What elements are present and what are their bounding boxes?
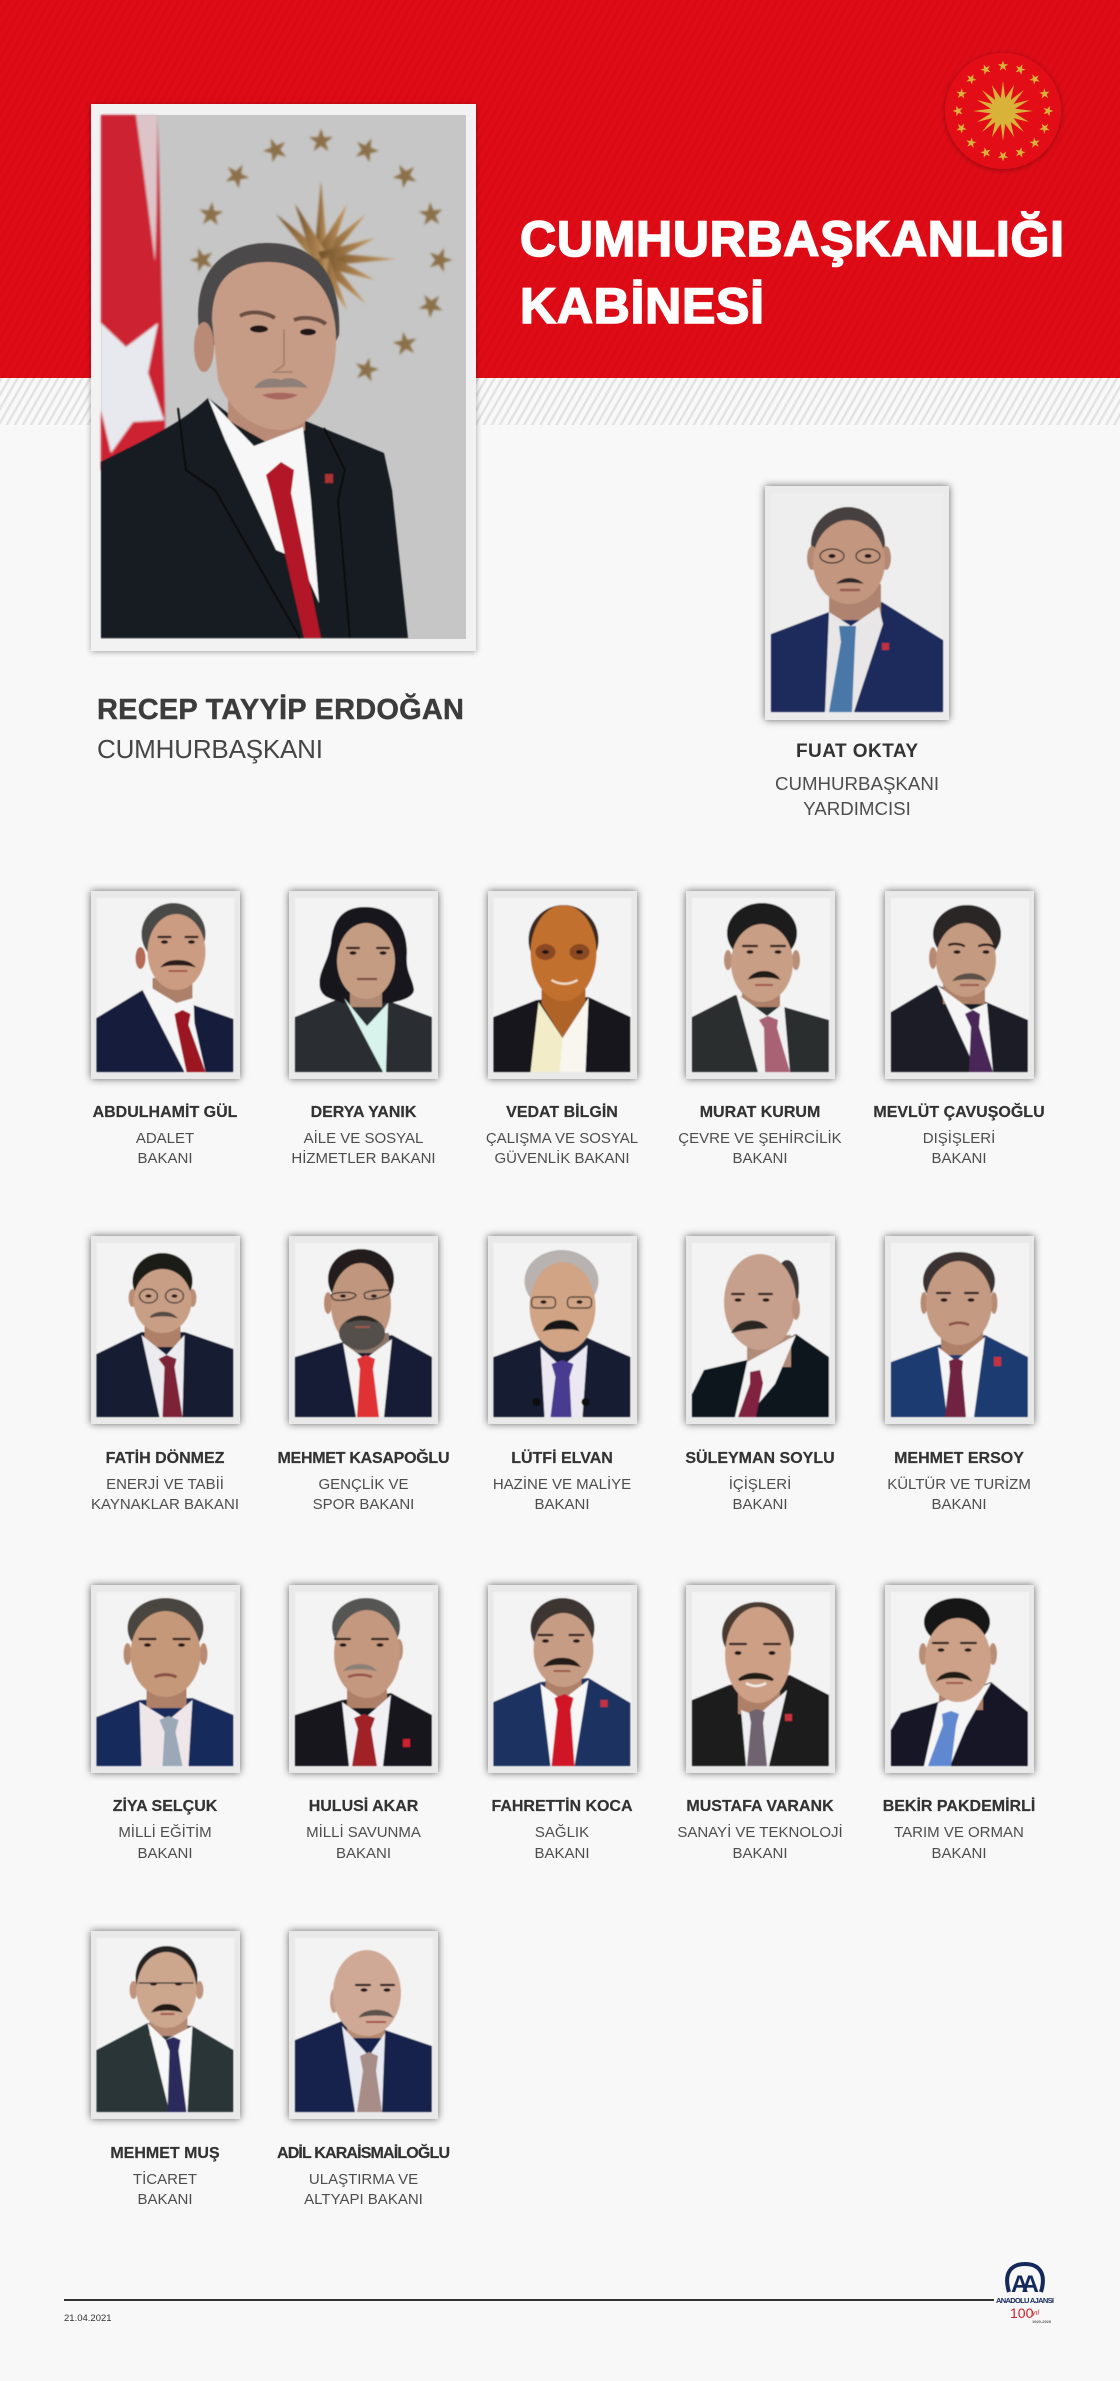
text: vice president role: YARDIMCISI xyxy=(803,798,911,819)
role xyxy=(91,1475,239,1513)
photo: Lütfi Elvan xyxy=(494,1243,632,1417)
panel: Mehmet Muş xyxy=(91,1931,240,2208)
name: MURAT KURUM xyxy=(700,1104,820,1121)
role: BAKANI xyxy=(137,1845,193,1862)
role: GENÇLİK VE xyxy=(318,1475,409,1493)
panel: Mehmet Ersoy xyxy=(885,1236,1034,1513)
panel: president portrait xyxy=(91,104,476,651)
photo: Mehmet Ersoy xyxy=(891,1243,1029,1417)
name: SÜLEYMAN SOYLU xyxy=(685,1448,835,1467)
heading: president name: RECEP TAYYİP ERDOĞAN xyxy=(97,692,464,726)
photo: Fuat Oktay xyxy=(771,494,943,712)
photo: Murat Kurum xyxy=(692,898,830,1072)
role: TARIM VE ORMAN xyxy=(894,1824,1024,1841)
panel: Abdulhamit Gül xyxy=(91,891,240,1167)
photo: Derya Yanık xyxy=(295,898,433,1072)
role: KAYNAKLAR BAKANI xyxy=(91,1496,239,1513)
name: ABDULHAMİT GÜL xyxy=(93,1102,238,1121)
role: BAKANI xyxy=(732,1150,788,1167)
role: BAKANI xyxy=(931,1845,987,1862)
role xyxy=(313,1475,414,1513)
photo: Mevlüt Çavuşoğlu xyxy=(891,898,1029,1072)
name: MEHMET ERSOY xyxy=(894,1450,1024,1467)
role: BAKANI xyxy=(137,1150,193,1167)
name: HULUSİ AKAR xyxy=(309,1797,419,1815)
role: BAKANI xyxy=(534,1845,590,1862)
name: MEVLÜT ÇAVUŞOĞLU xyxy=(873,1102,1045,1121)
role xyxy=(493,1475,631,1513)
photo: Mehmet Kasapoğlu xyxy=(295,1243,433,1417)
name: FATİH DÖNMEZ xyxy=(106,1448,225,1467)
role: HİZMETLER BAKANI xyxy=(291,1149,436,1167)
role: ENERJİ VE TABİİ xyxy=(106,1475,224,1493)
photo: Fahrettin Koca xyxy=(494,1592,632,1766)
photo: Fatih Dönmez xyxy=(96,1243,234,1417)
role: ALTYAPI BAKANI xyxy=(304,2191,423,2208)
logo: Anadolu Ajansı: AA xyxy=(1011,2271,1039,2298)
role xyxy=(304,2171,423,2208)
role: İÇİŞLERİ xyxy=(729,1475,791,1493)
name: LÜTFİ ELVAN xyxy=(511,1448,613,1467)
name: MEHMET KASAPOĞLU xyxy=(278,1448,450,1467)
role: ÇALIŞMA VE SOSYAL xyxy=(486,1130,638,1147)
name: DERYA YANIK xyxy=(311,1104,417,1121)
photo: Abdulhamit Gül xyxy=(96,898,234,1072)
panel: Mevlüt Çavuşoğlu xyxy=(873,891,1045,1167)
name: FAHRETTİN KOCA xyxy=(492,1797,633,1815)
role: MİLLİ SAVUNMA xyxy=(306,1823,421,1841)
name: BEKİR PAKDEMİRLİ xyxy=(883,1797,1035,1815)
name: VEDAT BİLGİN xyxy=(506,1103,618,1121)
text: vice president name: FUAT OKTAY xyxy=(796,741,918,762)
role: BAKANI xyxy=(732,1496,788,1513)
panel: Hulusi Akar xyxy=(289,1585,438,1862)
logo: Anadolu Ajansı: ANADOLU AJANSI xyxy=(996,2296,1054,2305)
role: BAKANI xyxy=(336,1845,391,1862)
panel: Mustafa Varank xyxy=(677,1585,843,1862)
panel: Vedat Bilgin xyxy=(486,891,638,1167)
role xyxy=(291,1129,436,1167)
striped band xyxy=(0,378,1120,425)
role: BAKANI xyxy=(137,2191,193,2208)
role: ADALET xyxy=(136,1130,194,1147)
photo: Hulusi Akar xyxy=(295,1592,433,1766)
role xyxy=(677,1823,843,1862)
role: SAĞLIK xyxy=(535,1824,589,1841)
panel: Fatih Dönmez xyxy=(91,1236,240,1513)
footer rule xyxy=(64,2299,994,2301)
name: ADİL KARAİSMAİLOĞLU xyxy=(277,2143,450,2162)
role xyxy=(486,1130,638,1167)
photo: Recep Tayyip Erdoğan xyxy=(101,115,466,639)
name: MEHMET MUŞ xyxy=(110,2145,220,2162)
panel: Adil Karaismailoğlu xyxy=(277,1931,450,2208)
role xyxy=(887,1475,1031,1513)
role xyxy=(534,1824,590,1862)
photo: Adil Karaismailoğlu xyxy=(295,1938,433,2112)
role: BAKANI xyxy=(534,1496,590,1513)
title: KABİNESİ xyxy=(520,278,764,334)
emblem: presidential seal xyxy=(945,53,1061,169)
text: vice president role: CUMHURBAŞKANI xyxy=(775,773,939,794)
role: SPOR BAKANI xyxy=(313,1496,414,1513)
panel: Ziya Selçuk xyxy=(91,1585,240,1862)
panel: Mehmet Kasapoğlu xyxy=(278,1236,450,1513)
panel: vice president xyxy=(765,486,949,720)
role: BAKANI xyxy=(732,1845,788,1862)
role xyxy=(894,1824,1024,1862)
logo: Anadolu Ajansı xyxy=(996,2264,1054,2324)
panel: Fahrettin Koca xyxy=(488,1585,637,1862)
role xyxy=(136,1130,194,1167)
role: BAKANI xyxy=(931,1496,987,1513)
role: ÇEVRE VE ŞEHİRCİLİK xyxy=(678,1129,842,1147)
role: KÜLTÜR VE TURİZM xyxy=(887,1475,1031,1493)
photo: Vedat Bilgin xyxy=(494,898,632,1072)
title: CUMHURBAŞKANLIĞI xyxy=(520,211,1064,267)
panel: Süleyman Soylu xyxy=(685,1236,835,1513)
role xyxy=(306,1823,421,1862)
role: BAKANI xyxy=(931,1150,987,1167)
role: MİLLİ EĞİTİM xyxy=(118,1823,212,1841)
panel: Bekir Pakdemirli xyxy=(883,1585,1035,1862)
panel: Derya Yanık xyxy=(289,891,438,1167)
photo: Süleyman Soylu xyxy=(692,1243,830,1417)
role: SANAYİ VE TEKNOLOJİ xyxy=(677,1823,843,1841)
logo: Anadolu Ajansı: 100 xyxy=(1010,2305,1034,2321)
photo: Mustafa Varank xyxy=(692,1592,830,1766)
text: vice president role xyxy=(775,773,939,819)
red header band xyxy=(0,0,1120,378)
role xyxy=(678,1129,842,1167)
role xyxy=(118,1823,212,1862)
role: GÜVENLİK BAKANI xyxy=(494,1149,630,1167)
photo: Ziya Selçuk xyxy=(96,1592,234,1766)
role xyxy=(133,2170,197,2208)
panel: Lütfi Elvan xyxy=(488,1236,637,1513)
title xyxy=(520,211,1064,334)
role: ULAŞTIRMA VE xyxy=(309,2171,418,2188)
name: MUSTAFA VARANK xyxy=(686,1798,834,1815)
photo: Bekir Pakdemirli xyxy=(891,1592,1029,1766)
role: HAZİNE VE MALİYE xyxy=(493,1475,631,1493)
role: TİCARET xyxy=(133,2170,197,2188)
role xyxy=(729,1475,791,1513)
text: president role: CUMHURBAŞKANI xyxy=(97,734,323,764)
role: AİLE VE SOSYAL xyxy=(304,1129,423,1147)
photo: Mehmet Muş xyxy=(96,1938,234,2112)
name: ZİYA SELÇUK xyxy=(113,1797,218,1815)
panel: Murat Kurum xyxy=(678,891,842,1167)
role: DIŞİŞLERİ xyxy=(923,1129,995,1147)
logo: Anadolu Ajansı: yıl xyxy=(1031,2310,1039,2317)
role xyxy=(923,1129,995,1167)
date: 21.04.2021 xyxy=(64,2313,112,2324)
logo: Anadolu Ajansı: 1920-2020 xyxy=(1032,2319,1052,2324)
